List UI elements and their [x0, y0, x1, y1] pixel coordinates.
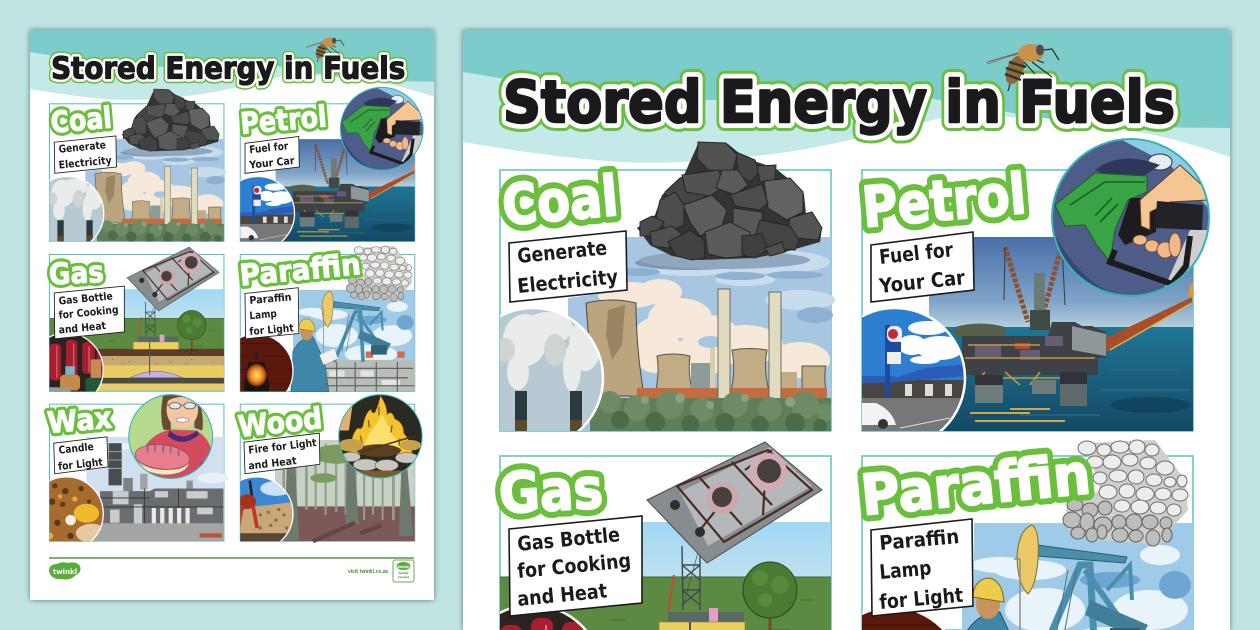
heading: Petrol: Petrol: [239, 99, 328, 141]
label: fuel for your car: [245, 136, 299, 173]
label: gas bottle: Gas Bottle: [516, 522, 621, 556]
heading: Gas: Gas: [497, 457, 605, 527]
panel: coal: [460, 142, 835, 451]
heading: Wax: Wax: [46, 401, 113, 440]
label: generate electricity: Generate: [516, 235, 608, 268]
heading: Paraffin: Paraffin: [238, 247, 362, 293]
panel: petrol: [820, 138, 1212, 451]
heading: Coal: Coal: [500, 164, 621, 239]
header waves: [463, 30, 1230, 163]
panel: petrol: [218, 87, 425, 252]
heading: Coal: Coal: [49, 101, 113, 140]
title: Stored Energy in Fuels: [51, 51, 405, 86]
heading: Paraffin: Paraffin: [238, 247, 362, 293]
title: Stored Energy in Fuels: [503, 68, 1175, 136]
title: Stored Energy in Fuels: [51, 51, 405, 86]
title: Stored Energy in Fuels: [503, 68, 1175, 136]
badge: quality: twinkl: [397, 565, 410, 569]
label: fire for light and heat: and Heat: [248, 455, 297, 472]
logo: twinkl: twinkl: [53, 568, 77, 576]
panel: wood: [218, 394, 424, 552]
label: generate electricity: Generate: [58, 139, 106, 156]
label: gas bottle: and Heat: [516, 578, 608, 611]
label: paraffin lamp: Paraffin: [249, 291, 292, 307]
label: fuel for your car: [871, 232, 974, 302]
poster sheet: [463, 30, 1230, 630]
label: candle for light: Candle: [58, 441, 94, 457]
panel: paraffin: [820, 440, 1193, 630]
icon: bee: [306, 37, 344, 62]
footer rule: [49, 557, 414, 559]
heading: Gas: Gas: [497, 457, 605, 527]
title: Stored Energy in Fuels: [503, 68, 1175, 136]
label: fuel for your car: Fuel for: [249, 140, 290, 156]
label: candle for light: [54, 437, 108, 474]
label: paraffin lamp: Lamp: [878, 556, 932, 584]
heading: Gas: Gas: [48, 255, 105, 292]
label: generate electricity: [54, 136, 116, 173]
panel: paraffin: [218, 246, 415, 409]
label: fuel for your car: Your Car: [248, 155, 296, 172]
label: paraffin lamp: Paraffin: [878, 524, 960, 555]
label: gas bottle: [509, 516, 642, 616]
label: fuel for your car: Fuel for: [878, 237, 954, 269]
label: paraffin lamp: [245, 288, 299, 339]
heading: Petrol: Petrol: [239, 99, 328, 141]
label: fire for light and heat: [244, 433, 320, 474]
heading: Petrol: Petrol: [860, 162, 1029, 241]
label: gas bottle: for Cooking: [58, 304, 119, 322]
badge: quality: Quality: [398, 571, 409, 575]
header waves: [30, 30, 434, 100]
label: gas bottle: for Cooking: [516, 548, 632, 583]
footer link: visit twinkl.co.za: [348, 569, 388, 575]
label: gas bottle: Gas Bottle: [58, 290, 113, 308]
panel: gas: [460, 442, 831, 630]
label: fire for light and heat: Fire for Light: [248, 437, 317, 457]
poster: large cropped view: [460, 30, 1230, 630]
heading: Paraffin: Paraffin: [858, 442, 1093, 529]
title: Stored Energy in Fuels: [51, 51, 405, 86]
panel: wax: [28, 390, 229, 551]
heading: Paraffin: Paraffin: [858, 442, 1093, 529]
label: gas bottle: and Heat: [58, 320, 106, 337]
heading: Petrol: Petrol: [860, 162, 1029, 241]
label: paraffin lamp: for Light: [249, 322, 294, 338]
label: generate electricity: [509, 231, 627, 302]
label: gas bottle: [54, 286, 124, 339]
heading: Wood: Wood: [236, 401, 324, 444]
label: candle for light: for Light: [58, 456, 103, 473]
label: paraffin lamp: Lamp: [249, 308, 278, 322]
poster content, small: [28, 30, 434, 552]
label: paraffin lamp: for Light: [878, 583, 964, 614]
label: generate electricity: Electricity: [58, 155, 112, 172]
heading: Coal: Coal: [49, 101, 113, 140]
label: generate electricity: Electricity: [516, 264, 619, 298]
poster: small full-page preview: [28, 30, 434, 600]
logo: twinkl: [49, 562, 80, 580]
label: fuel for your car: Your Car: [877, 265, 966, 298]
heading: Coal: Coal: [500, 164, 621, 239]
icon: bee: [987, 44, 1059, 91]
panel: gas: [28, 247, 224, 409]
panel: coal: [28, 89, 226, 252]
heading: Wax: Wax: [46, 401, 113, 440]
poster sheet: [30, 30, 434, 600]
heading: Gas: Gas: [48, 255, 105, 292]
heading: Wood: Wood: [236, 401, 324, 444]
badge: quality: Assured: [398, 575, 409, 579]
label: paraffin lamp: [871, 519, 973, 616]
badge: quality: [393, 560, 414, 582]
